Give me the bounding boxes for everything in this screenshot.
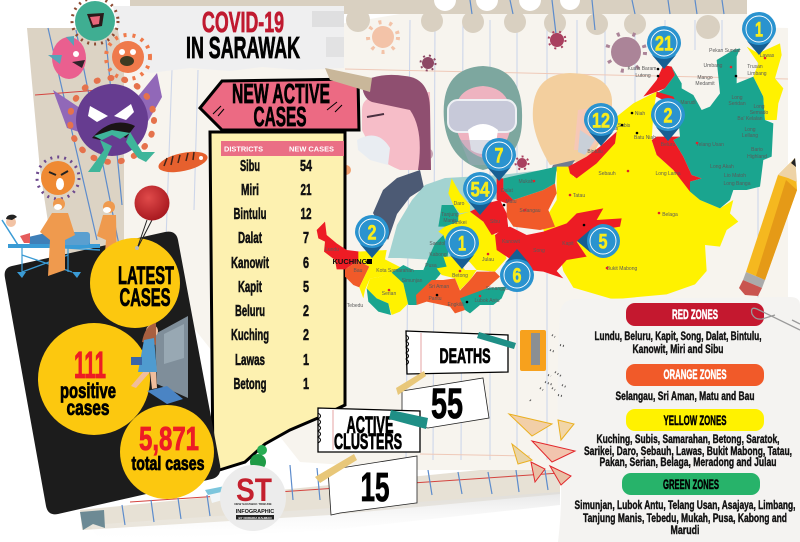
panel: new active cases table — [210, 132, 345, 472]
table header: DISTRICTS — [224, 144, 263, 154]
circle: latest cases: LATEST — [118, 262, 174, 290]
map pin: Miri 21: 21 — [655, 32, 673, 56]
table rows: 1 — [303, 352, 309, 369]
yellow zones — [584, 409, 792, 469]
sign: new active cases: NEW ACTIVE — [232, 78, 330, 109]
circle: positive cases: positive — [60, 380, 116, 403]
map: Tebedu green — [367, 288, 391, 315]
green zones — [574, 473, 796, 537]
map place labels: Niah — [635, 111, 645, 117]
map pin: Kapit 5: 5 — [598, 230, 608, 254]
tape: blue — [205, 486, 226, 503]
red zones: RED ZONES — [672, 306, 718, 322]
map place labels: Mango — [697, 75, 713, 81]
map place labels: Pekan Sundar — [709, 48, 741, 54]
table rows: Betong — [234, 376, 266, 393]
virus: orange — [106, 35, 150, 79]
panel: clusters count: 15 — [360, 464, 390, 510]
map: Sibu red — [470, 200, 508, 235]
table rows: 12 — [300, 206, 312, 223]
map: Bintulu red — [568, 132, 617, 178]
table rows: Dalat — [238, 230, 262, 247]
sign: new active cases — [200, 78, 359, 132]
map pin: Miri 21 — [647, 26, 681, 69]
map: Marudi Telang Usan green — [657, 48, 773, 208]
map place labels: Long — [744, 127, 756, 133]
map: Simunjan green — [392, 265, 438, 305]
map place labels: Sebauh — [598, 171, 616, 177]
back paper: left tan sheet — [27, 28, 128, 300]
map place labels: Bintulu — [587, 149, 603, 155]
map pin: Kuching 2: 2 — [368, 222, 376, 244]
map place labels: Kabong — [429, 252, 447, 258]
map place labels: Matu — [505, 199, 517, 205]
table rows — [231, 158, 312, 393]
map pin: Lawas 1 — [742, 12, 776, 55]
map: Lubok Antu green — [460, 287, 507, 313]
top tan strip with punched tabs — [130, 0, 747, 39]
table rows: 6 — [303, 255, 309, 272]
map place labels: Seridan — [728, 101, 746, 107]
virus: pink fish — [48, 36, 86, 79]
virus: orange small — [37, 157, 79, 199]
map place labels: Subis — [618, 123, 631, 129]
logo: ST infographic: NEW SARAWAK TRIBUNE — [234, 502, 272, 506]
map: Dalat red — [497, 178, 513, 203]
map of Sarawak: western divisions — [317, 178, 507, 315]
map place labels: Long Banga — [724, 181, 751, 187]
map pin: Sibu 54: 54 — [470, 178, 490, 202]
map place labels: Mukah — [518, 179, 534, 185]
map: Lundu red — [317, 222, 360, 269]
map place labels: Umbang — [704, 63, 723, 69]
circle: positive cases: cases — [66, 397, 110, 420]
table rows: 1 — [303, 376, 309, 393]
map place labels: Bukit Mabong — [607, 266, 638, 272]
panel: deaths: DEATHS — [440, 345, 490, 368]
panel: active clusters: CLUSTERS — [334, 429, 402, 454]
table header — [221, 141, 344, 156]
map place labels: Sibuti — [606, 126, 618, 132]
icon: green push pin — [250, 445, 267, 470]
background viruses — [341, 22, 645, 175]
map: Miri red — [643, 65, 675, 97]
map pin: Betong 1 — [445, 226, 479, 269]
map place labels: Long — [731, 95, 743, 101]
medical worker left — [40, 198, 75, 276]
map place labels: Betong — [452, 273, 468, 279]
map place labels: Dalat — [501, 188, 513, 194]
yellow zones: YELLOW ZONES — [664, 412, 726, 428]
map: Lawas Limbang yellow — [747, 43, 783, 120]
red zones: Kanowit, Miri and Sibu — [632, 344, 724, 356]
green zones: Marudi — [670, 525, 700, 537]
circle: positive cases: 111 — [74, 345, 106, 387]
map place labels: KUCHING — [332, 257, 368, 266]
table header: NEW CASES — [289, 144, 334, 154]
map place labels: Medamit — [695, 81, 715, 87]
panel: active clusters: ACTIVE — [346, 412, 394, 439]
map place labels: Daro — [454, 201, 465, 207]
virus: caterpillar — [157, 148, 209, 176]
map place labels: Manis — [443, 218, 457, 224]
map place labels — [325, 48, 775, 309]
illustration: stretcher and medical workers — [2, 198, 118, 283]
logo: ST infographic: ST — [236, 472, 272, 508]
title paper — [113, 6, 344, 73]
table rows: Kanowit — [231, 255, 269, 272]
table rows: 5 — [303, 279, 309, 296]
map: Kanowit Song Kapit red — [495, 208, 622, 278]
map: Mukah green — [503, 167, 557, 200]
panel: zones legend — [558, 297, 800, 542]
map place labels: Long — [753, 104, 765, 110]
map place labels: Bario — [751, 147, 763, 153]
table rows: Lawas — [235, 352, 265, 369]
map pin: Kanowit 6 — [500, 249, 534, 292]
map: Daro yellow — [448, 178, 470, 213]
orange zones — [616, 364, 764, 403]
panel: deaths count — [396, 371, 489, 428]
map pin: Kanowit 6: 6 — [512, 264, 522, 288]
table rows: 21 — [300, 182, 312, 199]
orange zones: Selangau, Sri Aman, Matu and Bau — [616, 391, 754, 403]
map place labels: Telang Usan — [696, 142, 724, 148]
orange zones: ORANGE ZONES — [664, 366, 726, 382]
icon: paperclip — [752, 308, 800, 330]
icon: sharpener — [520, 330, 546, 371]
map pin: Lawas 1: 1 — [755, 18, 763, 42]
map pin: Dalat 7 — [482, 138, 516, 181]
map place labels: Sibu — [490, 219, 500, 225]
circle: latest cases — [90, 238, 180, 328]
map pin: Beluru 2 — [651, 98, 685, 141]
map pin: Bintulu 12 — [584, 103, 618, 146]
map place labels: Pantu — [428, 296, 442, 302]
map place labels: Lio Matoh — [724, 173, 746, 179]
table rows: Sibu — [240, 158, 260, 175]
map pin: Betong 1: 1 — [458, 232, 466, 256]
map place labels: Bau — [354, 268, 363, 274]
virus: big purple bat — [53, 73, 162, 172]
map pin: Dalat 7: 7 — [494, 144, 504, 168]
back paper: bottom tan strip — [80, 462, 560, 542]
map place labels: Long Lama — [655, 171, 681, 177]
map place labels: Lubok Antu — [474, 298, 500, 304]
map: Betong yellow — [437, 257, 477, 290]
map place labels: Kota Samarahan — [376, 268, 414, 274]
map place labels: Beluru — [661, 142, 675, 148]
panel: active clusters — [318, 408, 428, 454]
icon: red push pin — [134, 186, 170, 250]
map place labels: Lawas — [760, 53, 775, 59]
map place labels: Semado — [750, 110, 769, 116]
map: Sri Aman orange — [416, 272, 500, 313]
map place labels: Tebedu — [347, 303, 363, 309]
table rows: 2 — [303, 327, 309, 344]
map place labels: Lutong — [635, 73, 651, 79]
map: Sarikei and Julau yellow — [438, 212, 507, 272]
virus: teal — [72, 0, 118, 44]
map: Selangau orange — [507, 183, 557, 230]
map place labels: Lellang — [742, 133, 758, 139]
illustration: woman — [533, 73, 612, 172]
green zones: GREEN ZONES — [663, 476, 719, 492]
map place labels: Engkilili — [448, 302, 464, 308]
map place labels: Kanowit — [502, 239, 521, 245]
phone — [5, 232, 220, 514]
map place labels: Long Akah — [710, 164, 734, 170]
map place labels: Serian — [382, 291, 396, 297]
map place labels: Julau — [482, 257, 494, 263]
icon: pencil — [739, 158, 797, 296]
sign: new active cases: CASES — [254, 101, 306, 132]
map: Saratok and Pusa green — [423, 235, 448, 277]
virus characters — [37, 0, 209, 199]
map of Sarawak: central and northern divisions — [470, 43, 783, 299]
circle: total cases: 5,871 — [139, 420, 199, 457]
panel: deaths — [406, 331, 516, 374]
table rows: Miri — [241, 182, 259, 199]
map: Kuching yellow — [358, 250, 403, 298]
map: Serian yellow — [367, 272, 408, 315]
map place labels: Sri Aman — [429, 284, 449, 290]
map pin: Beluru 2: 2 — [664, 104, 672, 128]
title: COVID-19 — [202, 7, 284, 39]
table rows: 54 — [300, 158, 312, 175]
map place labels: Kuala Baram — [628, 66, 656, 72]
map place labels: Batu Niah — [634, 135, 656, 141]
map place labels: Pusa — [425, 263, 437, 269]
map place labels: Song — [533, 248, 545, 254]
circle: total cases: total cases — [132, 454, 204, 475]
table rows: Kuching — [231, 327, 269, 344]
map: Bau orange — [345, 261, 369, 287]
tape on sign — [325, 68, 372, 92]
table rows: 7 — [303, 230, 309, 247]
map: Miri lower red — [656, 92, 677, 103]
map place labels: Ba' Kelalan — [737, 116, 763, 122]
illustration: woman leaving door — [131, 316, 188, 404]
map pin: Kapit 5 — [577, 224, 620, 258]
map: Tanjung Manis green — [438, 205, 458, 227]
table rows: Beluru — [235, 303, 265, 320]
map pin: Sibu 54 — [463, 172, 497, 215]
table rows: Kapit — [238, 279, 262, 296]
map place labels: Highland — [747, 154, 767, 160]
bookmark — [80, 510, 105, 530]
panel: clusters count — [315, 454, 417, 515]
illustration: hazmat figure — [388, 66, 560, 262]
map place labels: Lundu — [325, 247, 339, 253]
logo: ST infographic — [220, 465, 286, 531]
map pin: Bintulu 12: 12 — [592, 110, 610, 132]
notebook paper — [124, 14, 788, 470]
map place labels: Marudi — [680, 100, 696, 106]
illustration: man with mask — [357, 75, 431, 240]
map place labels: Tanjung — [441, 212, 459, 218]
map place labels: Tatau — [573, 193, 585, 199]
table rows: Bintulu — [234, 206, 266, 223]
map place labels: Selangau — [519, 208, 541, 214]
map place labels: Trusan — [747, 64, 763, 70]
map: Beluru red — [652, 137, 702, 192]
icon: pencil shavings — [509, 414, 575, 485]
map place labels: Saratok — [429, 241, 447, 247]
map place labels: Sarikei — [451, 220, 467, 226]
pencil dust specks — [530, 335, 566, 402]
table rows: 2 — [303, 303, 309, 320]
panel: deaths count: 55 — [431, 380, 463, 428]
title — [186, 7, 300, 65]
logo: ST infographic: INFOGRAPHIC — [236, 509, 274, 515]
map place labels: Simanggang — [486, 286, 514, 292]
map pin: Kuching 2 — [355, 215, 389, 258]
circle: total cases — [120, 405, 214, 499]
circle: latest cases: CASES — [120, 284, 170, 312]
title: IN SARAWAK — [186, 30, 300, 65]
map place labels: Limbang — [747, 71, 767, 77]
logo: ST infographic: BY NORHIDA RAHMAN — [238, 516, 272, 520]
circle: positive cases — [38, 323, 150, 435]
medical worker right — [95, 201, 118, 283]
map: large yellow zone — [543, 92, 738, 299]
map place labels: Simunjan — [402, 278, 423, 284]
stretcher — [2, 215, 100, 278]
map place labels: Kapit — [562, 241, 574, 247]
map place labels: Belaga — [662, 212, 678, 218]
red zones — [594, 303, 764, 356]
